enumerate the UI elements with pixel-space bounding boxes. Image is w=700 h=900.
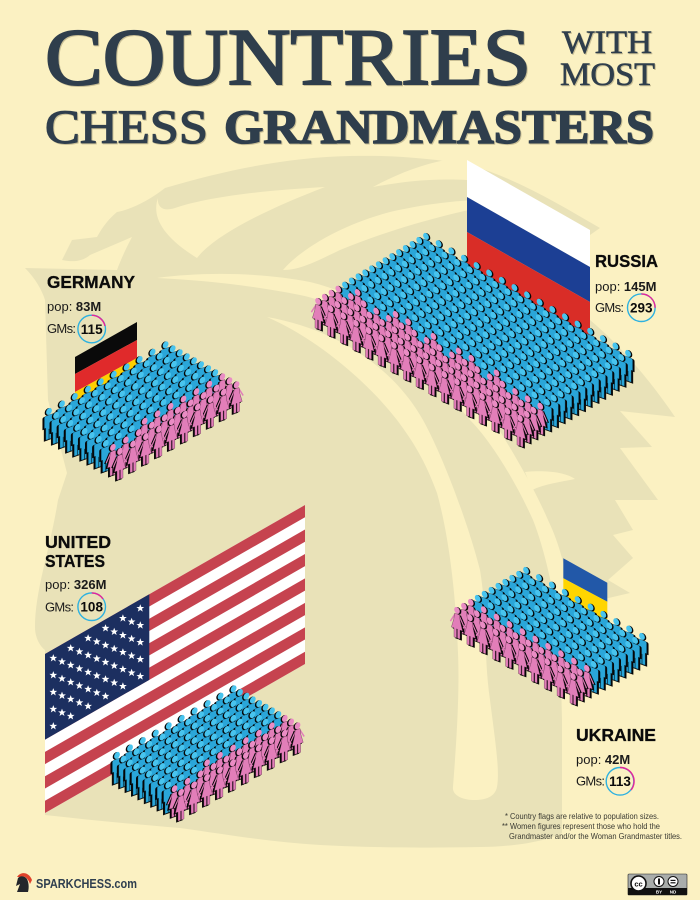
footnotes [502, 811, 682, 841]
title: MOST [560, 57, 655, 93]
badge: creative commons: cc [634, 879, 643, 888]
label: Russia: RUSSIA [595, 251, 658, 271]
label: United States: UNITED [45, 532, 111, 552]
label: United States: 108 [80, 600, 103, 614]
panel: Ukraine [450, 558, 656, 795]
flag: Germany [75, 322, 137, 410]
label: United States: GMs: [45, 600, 74, 615]
label: Ukraine: GMs: [576, 774, 605, 789]
flag: Ukraine [563, 558, 607, 621]
title: GRANDMASTERS [224, 101, 654, 154]
panel: Germany [43, 272, 243, 483]
label: Germany: GERMANY [47, 272, 135, 292]
flag: Russia [467, 160, 590, 338]
label: Ukraine: pop: 42M [576, 752, 630, 767]
footnotes: ** Women figures represent those who hold the [502, 821, 660, 831]
title: WITH [562, 25, 652, 61]
badge: creative commons: BY [656, 890, 662, 895]
figures: United States grandmasters [111, 684, 304, 824]
title [45, 14, 655, 154]
label: Russia: pop: 145M [595, 279, 656, 294]
title: CHESS [45, 101, 208, 154]
badge: creative commons [628, 874, 687, 895]
label: Russia [595, 251, 658, 322]
footnotes: Grandmaster and/or the Woman Grandmaster titles. [509, 831, 682, 841]
label: Germany: pop: 83M [47, 299, 101, 314]
label: Russia: GMs: [595, 300, 624, 315]
label: Ukraine: UKRAINE [576, 725, 656, 745]
label: United States: STATES [45, 551, 105, 571]
figures: Russia grandmasters [311, 231, 634, 450]
label: Ukraine: 113 [609, 774, 631, 789]
flag: United States [45, 505, 305, 813]
label: Russia: 293 [630, 300, 653, 316]
panel: Russia [311, 160, 658, 450]
icon: knight [16, 873, 32, 892]
label: Ukraine [576, 725, 656, 795]
badge: creative commons: ND [670, 890, 677, 895]
title: COUNTRIES [45, 14, 531, 102]
figures: Ukraine grandmasters [450, 565, 648, 708]
label: Germany: 115 [81, 322, 103, 337]
footnotes: * Country flags are relative to population sizes. [505, 811, 659, 821]
background knight silhouette [25, 156, 675, 848]
label: United States [45, 532, 111, 620]
figures: Germany grandmasters [43, 340, 243, 483]
label: United States: pop: 326M [45, 577, 106, 592]
label: Germany [47, 272, 135, 343]
panel: United States [45, 505, 305, 824]
label: Germany: GMs: [47, 321, 76, 336]
logo: SparkChess [16, 873, 137, 892]
logo: SparkChess: SPARKCHESS.com [36, 877, 137, 891]
